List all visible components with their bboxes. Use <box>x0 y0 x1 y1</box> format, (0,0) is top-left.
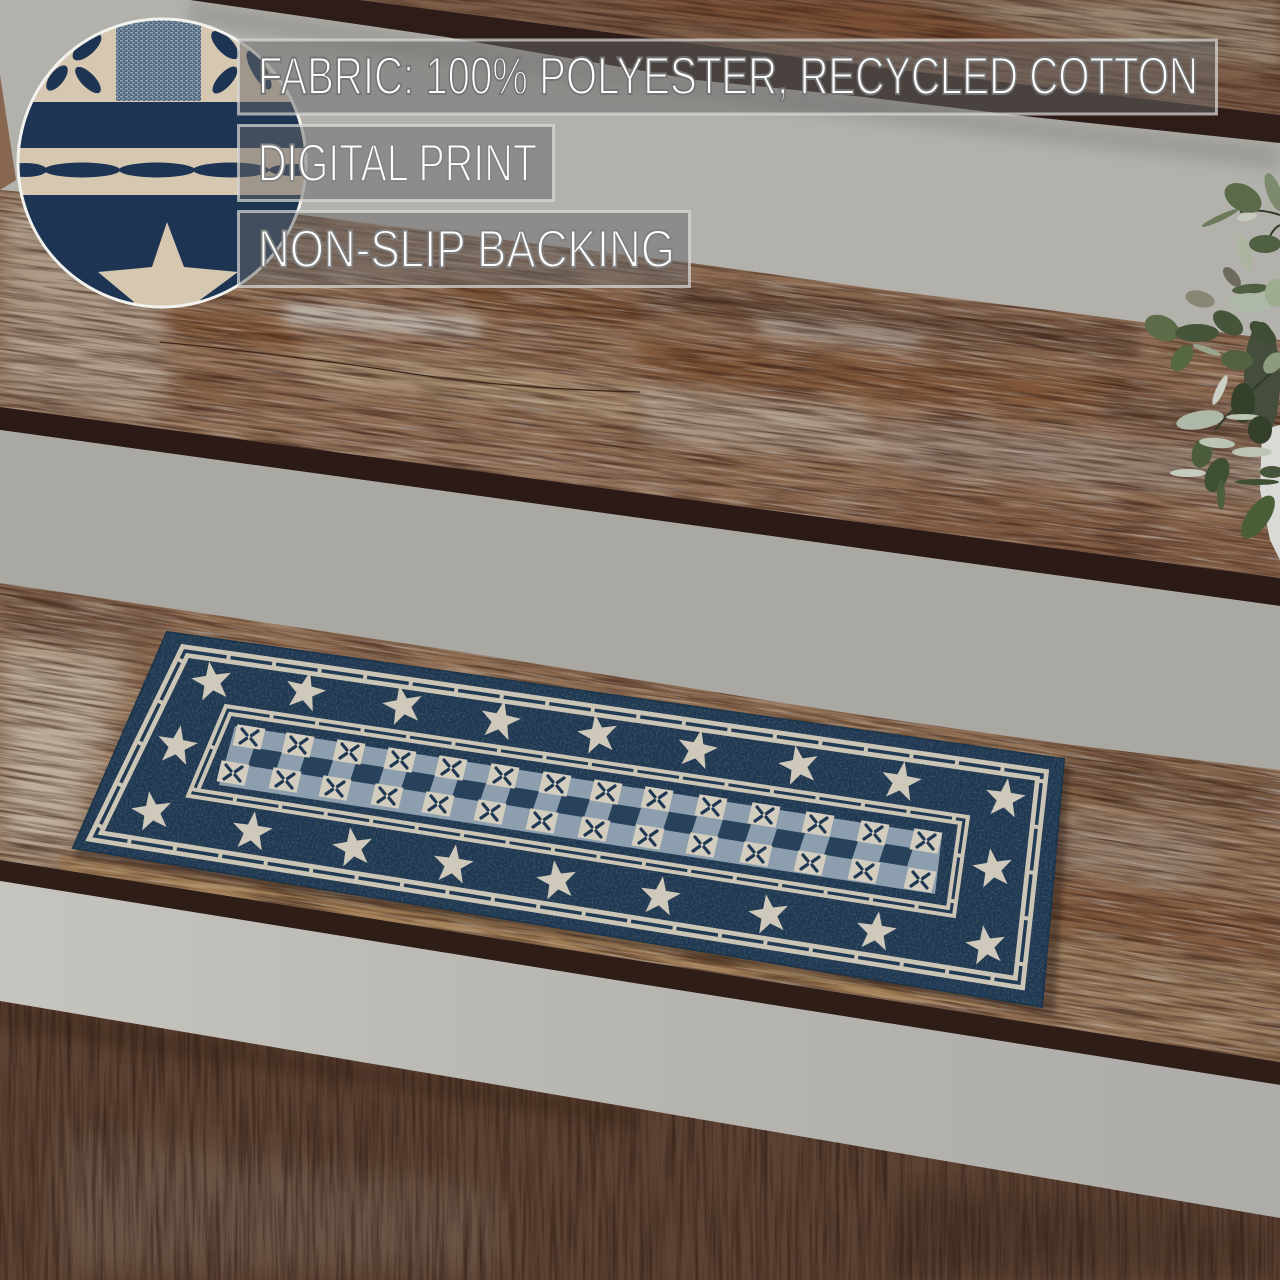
tread 2 wood <box>0 170 1280 600</box>
tread 3 dark edge <box>0 860 1280 1085</box>
inner border <box>193 710 964 912</box>
pot <box>1260 425 1280 560</box>
floor <box>0 990 1280 1280</box>
riser 3 <box>0 881 1280 1218</box>
tread 3 wood <box>0 560 1280 1073</box>
rug body <box>73 632 1064 1007</box>
outer border <box>95 651 1042 983</box>
plant <box>1141 171 1280 560</box>
lens ring <box>18 19 306 307</box>
top tread dark edge <box>190 0 1280 143</box>
woven check <box>116 15 201 101</box>
wood crack <box>160 342 640 392</box>
cream checks bottom row <box>216 760 936 893</box>
stems <box>1215 211 1280 430</box>
tread 2 dark edge <box>0 407 1280 606</box>
navy checks <box>248 748 913 866</box>
label: print: DIGITAL PRINT <box>258 134 537 193</box>
cream checks top row <box>232 724 942 854</box>
large star <box>98 222 238 306</box>
label: backing <box>238 212 690 286</box>
leaves <box>1141 171 1280 544</box>
oval chain <box>20 162 304 178</box>
label: print <box>238 126 554 200</box>
petals <box>46 30 272 94</box>
label: backing: NON-SLIP BACKING <box>258 220 675 279</box>
magnified fabric lens <box>16 18 308 308</box>
foliage mass <box>1244 322 1280 438</box>
stars <box>129 658 1028 966</box>
rug weave <box>60 620 1080 1020</box>
top tread wood <box>330 0 1280 122</box>
rug shadow <box>73 640 1070 1015</box>
left post <box>0 75 16 190</box>
rug <box>60 620 1080 1020</box>
riser 2 <box>0 430 1280 770</box>
riser 1 shadow <box>190 0 1280 170</box>
lens content <box>20 20 304 306</box>
navy band <box>15 102 315 148</box>
checker field <box>219 726 942 894</box>
lower navy band <box>23 195 301 302</box>
